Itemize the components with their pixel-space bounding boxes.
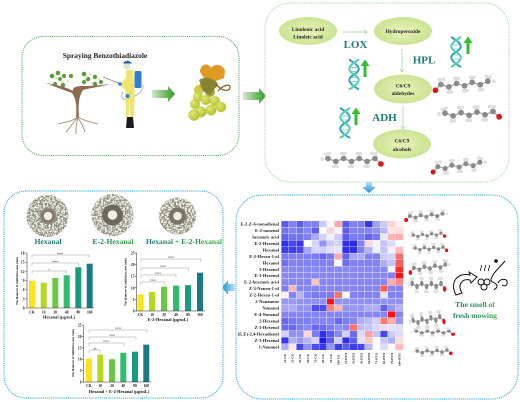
bar chart: hexanal: 12: [21, 270, 25, 274]
label: E-2-Hexanal: E-2-Hexanal: [93, 237, 133, 246]
bar chart: hexanal plus E-2-hexanal: 160: [144, 384, 149, 388]
heatmap column labels: 56-CK: [306, 353, 310, 363]
molecule: aldehyde 1: [432, 74, 496, 95]
panel: spraying treatment: [22, 36, 239, 156]
heatmap column labels: [283, 352, 402, 366]
row 2-Hexenal: [281, 318, 403, 324]
label: Hexanal + E-2-Hexanal: Hexanal + E-2-Hexanal: [146, 237, 222, 246]
bar chart: E-2-hexanal: ****: [150, 278, 156, 282]
heatmap column labels: 56-BTH: [367, 352, 371, 364]
row Z-3-Hexenol: [281, 324, 403, 331]
heatmap row labels: 1-Nonanol: [259, 344, 280, 349]
row hexanoic acid: [281, 234, 403, 240]
panel: biosynthesis pathway: [265, 3, 509, 182]
row E-2-hexenoic acid: [281, 279, 403, 285]
bar chart: hexanal: Hexanal (μg/mL): [43, 314, 76, 320]
bar chart: E-2-hexanal: E-2-Hexanal (μg/mL): [148, 317, 189, 322]
heatmap row labels: Z-2-Hexen-1-ol: [249, 293, 280, 298]
row Hexanal: [281, 247, 403, 253]
bar chart: E-2-hexanal: [124, 252, 205, 322]
row E-3-Hexenol: [281, 272, 403, 279]
heatmap column labels: 21-CK: [283, 353, 287, 363]
heatmap column labels: 100-BTH: [398, 353, 402, 366]
photo: mixed plate: [159, 198, 196, 234]
heatmap row labels: hexanoic acid: [252, 234, 279, 240]
label: HPL: HPL: [413, 54, 435, 66]
bar chart: hexanal plus E-2-hexanal: Hexanal + E-2-Hexanal (μg/mL): [89, 389, 150, 394]
row 1-Nonanol: [281, 344, 403, 350]
panel: inhibition assays: [4, 191, 223, 398]
bar chart: hexanal: 0: [23, 306, 25, 310]
bar chart: E-2-hexanal: 160: [197, 313, 203, 317]
arrow: to alcohols: [401, 107, 405, 129]
heatmap column labels: 65-CK: [321, 353, 325, 363]
bar chart: hexanal: 40: [65, 310, 69, 314]
bar chart: hexanal: ****: [57, 252, 64, 256]
heatmap column labels: 100-CK: [336, 354, 340, 365]
bar chart: E-2-hexanal: ****: [168, 256, 174, 260]
icon: DNA up ADH: [340, 108, 360, 138]
molecule: alcohol 1: [320, 152, 384, 168]
icon: sprayer person: [103, 61, 143, 128]
bar chart: E-2-hexanal: 10: [131, 286, 135, 290]
heatmap column labels: 78-CK: [329, 353, 333, 363]
row 2-Nonanone: [281, 298, 403, 305]
bar chart: hexanal: 9: [23, 279, 25, 283]
heatmap column labels: 71-CK: [314, 353, 318, 363]
bar chart: E-2-hexanal: 40: [174, 313, 178, 317]
bar chart: E-2-hexanal: ****: [160, 264, 166, 268]
node: hydroperoxide: Hydroperoxide: [386, 29, 421, 35]
bar chart: hexanal: ****: [52, 260, 58, 264]
bar chart: hexanal: 80: [77, 310, 80, 314]
row E-2-Hexen-1-ol: [281, 253, 403, 260]
icon: smell of mowing: [454, 260, 507, 295]
node: aldehydes: C6/C9: [396, 84, 411, 90]
panel: volatile heatmap: [236, 195, 518, 399]
heatmap column labels: 35-CK: [291, 353, 295, 363]
node: linolenic and linoleic acid: [279, 17, 337, 45]
bar chart: hexanal: *: [48, 268, 50, 272]
row 3-Hexenol: [281, 266, 403, 272]
bar chart: hexanal: CK: [29, 310, 35, 314]
heatmap row labels: 3-Hexenol: [259, 267, 280, 272]
arrow: to aldehydes: [400, 49, 404, 72]
caption: smell of fresh mowing: fresh mowing: [453, 311, 497, 320]
bar chart: hexanal: 3: [23, 297, 25, 301]
heatmap row labels: E-4-Nonenal: [254, 312, 280, 317]
row Z-2-Hexen-1-ol: [281, 292, 403, 298]
heatmap row labels: (E,E)-2,4-Hexadienal: [238, 332, 280, 336]
row Hexanol: [281, 260, 403, 266]
heatmap column labels: 45-BTH: [359, 352, 363, 364]
bar chart: hexanal plus E-2-hexanal: ****: [109, 334, 116, 338]
row E-2-Z-6-nonadienal: [281, 221, 403, 227]
heatmap column labels: 45-CK: [298, 353, 302, 363]
bar chart: hexanal plus E-2-hexanal: 25: [78, 324, 82, 328]
bar chart: hexanal plus E-2-hexanal: CK: [86, 384, 92, 388]
bar chart: hexanal: 10: [42, 310, 46, 314]
bar chart: hexanal plus E-2-hexanal: 0: [80, 380, 82, 384]
molecules beside heatmap: [404, 209, 455, 357]
node: alcohols: alcohols: [393, 147, 411, 153]
heatmap column labels: 21-BTH: [344, 352, 348, 364]
row (E,E)-2,4-Hexadienal: [281, 331, 403, 337]
heatmap row labels: 2-Hexenal: [259, 318, 280, 324]
bar chart: hexanal plus E-2-hexanal: 10: [78, 358, 82, 362]
node: linolenic and linoleic acid: Linolenic acid: [292, 27, 324, 33]
icon: grapevine: [46, 71, 110, 134]
bar chart: hexanal plus E-2-hexanal: 20: [110, 384, 114, 388]
bar chart: hexanal: 6: [23, 288, 25, 292]
caption: smell of fresh mowing: The smell of: [455, 300, 495, 309]
row E-4-Nonenal: [281, 311, 403, 318]
row Z-3-Hexenal: [281, 337, 403, 344]
bar chart: E-2-hexanal: CK: [138, 313, 143, 317]
bar chart: E-2-hexanal: 0: [133, 310, 135, 314]
heatmap row labels: E-2-Hexen-1-ol: [249, 254, 280, 259]
bar chart: hexanal plus E-2-hexanal: 20: [78, 335, 82, 339]
heatmap row labels: Z-3-Hexenol: [254, 325, 280, 330]
bar chart: hexanal: 15: [21, 261, 25, 265]
bar chart: hexanal: The diameter of inhibition zone (mm): [15, 257, 19, 305]
row Nonanal: [281, 305, 403, 311]
heatmap row labels: E-2-Z-6-nonadienal: [240, 222, 280, 226]
bar chart: hexanal plus E-2-hexanal: 80: [133, 384, 137, 388]
bar chart: hexanal plus E-2-hexanal: 5: [80, 369, 82, 373]
title: spraying benzothiadiazole: Spraying Benzothiadiazole: [63, 51, 148, 60]
node: linolenic and linoleic acid: Linoleic acid: [293, 34, 323, 40]
bar chart: hexanal plus E-2-hexanal: 40: [122, 384, 125, 388]
bar chart: hexanal plus E-2-hexanal: ****: [115, 326, 122, 330]
bar chart: hexanal: 160: [87, 310, 93, 314]
heatmap row labels: 2-Nonanone: [255, 299, 279, 304]
label: ADH: ADH: [372, 112, 397, 124]
row E-2-Hexenal: [281, 240, 403, 247]
heatmap row labels: E-2-nonenal: [255, 228, 280, 233]
bar chart: E-2-hexanal: 20: [162, 313, 166, 317]
heatmap grid: [281, 221, 403, 350]
bar chart: E-2-hexanal: 80: [186, 313, 190, 317]
heatmap row labels: E-2-Hexenal: [254, 241, 280, 246]
heatmap row labels: Hexanal: [263, 248, 280, 252]
bar chart: E-2-hexanal: 5: [133, 298, 135, 302]
bar chart: E-2-hexanal: 10: [150, 313, 154, 317]
bar chart: E-2-hexanal: 20: [131, 263, 135, 267]
molecule: aldehyde 2: [437, 104, 502, 123]
heatmap row labels: Hexanol: [263, 260, 280, 265]
heatmap row labels: E-3-Hexenol: [254, 273, 280, 278]
heatmap column labels: 35-BTH: [352, 352, 356, 364]
icon: DNA up HPL: [451, 36, 472, 67]
node: aldehydes: [374, 74, 432, 104]
bar chart: hexanal plus E-2-hexanal: ****: [103, 340, 110, 344]
bar chart: E-2-hexanal: The diameter of inhibition zone (mm): [124, 258, 128, 306]
heatmap row labels: Z-3-Nonen-1-ol: [249, 286, 280, 291]
heatmap row labels: E-2-hexenoic acid: [244, 280, 279, 285]
icon: grape cluster: [188, 65, 230, 121]
heatmap row labels: Z-3-Hexenal: [254, 338, 280, 343]
bar chart: E-2-hexanal: ****: [155, 272, 162, 276]
label: LOX: LOX: [344, 39, 367, 51]
heatmap column labels: 78-BTH: [390, 352, 394, 364]
arrow: spraying to grapes: [152, 86, 175, 102]
bar chart: hexanal plus E-2-hexanal: [71, 324, 151, 394]
bar chart: hexanal plus E-2-hexanal: 15: [78, 346, 82, 350]
bar chart: E-2-hexanal: 15: [131, 275, 135, 279]
node: alcohols: [373, 130, 431, 158]
molecule: alcohol 2: [429, 156, 488, 176]
row E-2-nonenal: [281, 227, 403, 234]
bar chart: E-2-hexanal: 25: [131, 252, 135, 256]
heatmap row labels: Nonanal: [262, 306, 280, 311]
bar chart: hexanal: 18: [21, 252, 25, 256]
label: Hexanal: Hexanal: [34, 237, 62, 246]
row Z-3-Nonen-1-ol: [281, 285, 403, 292]
arrow: pathway down to volatile panel: [362, 182, 376, 193]
arrow: to hydroperoxide: [343, 30, 367, 34]
caption: smell of fresh mowing: [453, 300, 497, 320]
arrow: grapes to pathway: [243, 88, 266, 104]
bar chart: hexanal: [15, 252, 94, 320]
heatmap row labels: [238, 222, 280, 349]
bar chart: hexanal plus E-2-hexanal: The diameter of inhibition zone (mm): [71, 329, 75, 377]
node: alcohols: C6/C9: [395, 138, 410, 144]
bar chart: hexanal plus E-2-hexanal: 10: [99, 384, 102, 388]
photo: E-2-hexanal plate: [92, 194, 134, 236]
node: hydroperoxide: [374, 17, 432, 45]
heatmap column labels: 71-BTH: [375, 352, 379, 364]
bar chart: hexanal plus E-2-hexanal: ns: [94, 346, 97, 350]
icon: DNA up LOX: [349, 60, 370, 90]
node: aldehydes: aldehydes: [392, 91, 414, 97]
heatmap column labels: 65-BTH: [382, 352, 386, 364]
arrow: volatile panel to bioassay panel: [222, 280, 235, 295]
photo: hexanal plate: [26, 195, 68, 237]
bar chart: hexanal: 20: [54, 310, 57, 314]
